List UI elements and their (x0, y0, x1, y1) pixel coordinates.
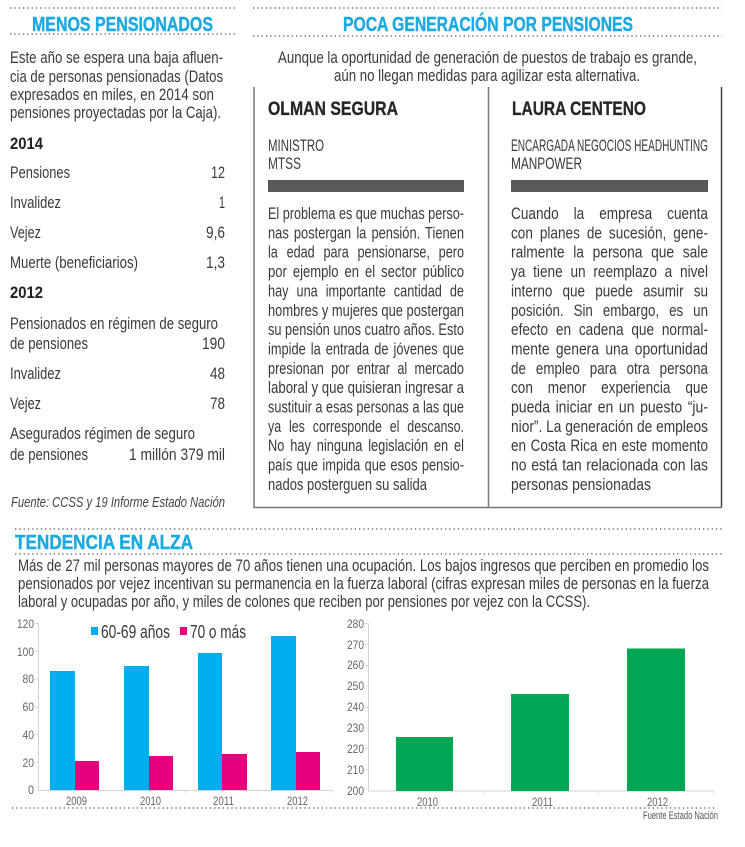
quote text: nas postergan la pensión. Tienen (268, 223, 464, 242)
y axis labels: 200 (347, 784, 364, 798)
data list: 2012: de pensiones (10, 445, 88, 464)
role: MINISTRO (268, 136, 324, 155)
text block: introduction (10, 48, 223, 122)
y axis labels: 210 (347, 763, 364, 777)
quote text: pueda iniciar en un puesto “ju- (511, 398, 708, 416)
x axis labels (417, 795, 668, 809)
bars: 70 o más (75, 752, 320, 790)
y axis labels: 250 (347, 679, 364, 693)
column: Laura Centeno (511, 98, 708, 494)
data list: 2012 (10, 283, 225, 464)
quote text: El problema es que muchas perso- (268, 204, 464, 223)
data list: 2014: Invalidez (10, 193, 61, 212)
quote text: presionan por entrar al mercado (268, 359, 464, 378)
divider bar (511, 180, 708, 192)
text block: trend description: laboral y ocupadas por año, y miles de colones que reciben por pensiones por vejez con la CCSS). (18, 592, 590, 611)
data list: 2014: 12 (211, 163, 225, 182)
x axis labels: 2009 (66, 794, 87, 808)
y axis labels: 80 (22, 672, 34, 686)
quote text: por ejemplo en el sector público (268, 262, 464, 281)
y axis labels: 120 (17, 617, 34, 631)
y axis labels: 240 (347, 700, 364, 714)
y axis labels: 220 (347, 742, 364, 756)
role (511, 136, 708, 173)
text block: introduction: Este año se espera una baja afluen- (10, 48, 223, 67)
text block: introduction: cia de personas pensionadas (Datos (10, 67, 223, 86)
text block: introduction: expresados en miles, en 2014 son (10, 85, 214, 104)
quote text: país que impida que esos pensio- (268, 456, 464, 474)
x axis labels: 2011 (532, 795, 553, 809)
text block: trend description (18, 556, 709, 611)
heading: menos pensionados: MENOS PENSIONADOS (32, 14, 213, 36)
bar chart: workers by age group (17, 617, 332, 808)
y axis labels: 0 (28, 783, 34, 797)
role: MTSS (268, 154, 301, 173)
name: LAURA CENTENO (512, 98, 646, 120)
data list: 2012: 48 (210, 364, 225, 383)
heading: poca generacion por pensiones: POCA GENERACIÓN POR PENSIONES (343, 12, 633, 36)
quote text (268, 204, 464, 494)
y axis labels: 60 (22, 700, 34, 714)
x axis labels: 2012 (287, 794, 308, 808)
column: Olman Segura (268, 98, 464, 494)
x axis labels: 2010 (140, 794, 161, 808)
data list: 2014: 9,6 (206, 223, 225, 242)
quote text: la edad para pensionarse, pero (268, 243, 464, 262)
x axis labels: 2012 (647, 795, 668, 809)
y axis labels: 20 (22, 756, 34, 770)
y axis labels: 280 (347, 617, 364, 631)
data list: 2012: 1 millón 379 mil (129, 445, 225, 464)
quote text: sustituir a esas personas a las que (268, 398, 464, 416)
data list: 2014: 2014 (10, 134, 43, 153)
panel: menos pensionados (10, 14, 225, 511)
frame: two interview columns (254, 87, 722, 508)
quote text: No hay ninguna legislación en el (268, 436, 464, 455)
legend: 70 o más (190, 622, 246, 642)
y axis labels (17, 617, 34, 797)
bars (396, 648, 685, 791)
bars: 60-69 años (50, 636, 296, 790)
data list: 2012: Invalidez (10, 364, 61, 383)
y axis labels: 100 (17, 645, 34, 659)
role (268, 136, 324, 173)
legend (91, 622, 246, 642)
y axis labels: 40 (22, 728, 34, 742)
heading: tendencia en alza: TENDENCIA EN ALZA (15, 532, 193, 554)
source note: Fuente: CCSS y 19 Informe Estado Nación (11, 495, 225, 511)
data list: 2014: Vejez (10, 223, 41, 242)
y axis labels: 270 (347, 638, 364, 652)
data list: 2012: Pensionados en régimen de seguro (10, 314, 218, 333)
quote text (511, 204, 708, 494)
quote text: impide la entrada de jóvenes que (268, 340, 464, 358)
data list: 2012: 78 (210, 394, 225, 413)
quote text: ya les corresponde el descanso. (268, 417, 464, 436)
divider bar (268, 180, 464, 192)
quote text: no está tan relacionada con las (511, 456, 708, 474)
data list: 2014: Pensiones (10, 163, 70, 182)
role: MANPOWER (511, 154, 582, 173)
text block: introduction: pensiones proyectadas por la Caja). (10, 103, 221, 122)
data list: 2012: Asegurados régimen de seguro (10, 424, 195, 443)
legend: 60-69 años (101, 622, 170, 642)
text block: section intro: aún no llegan medidas para agilizar esta alternativa. (334, 66, 640, 85)
y axis labels (347, 617, 364, 798)
bar chart: pension amounts (347, 617, 714, 809)
text block: section intro (278, 48, 697, 85)
data list: 2014: Muerte (beneficiarios) (10, 253, 138, 272)
quote text: personas pensionadas (511, 475, 651, 494)
data list: 2014: 1 (219, 193, 225, 212)
x axis labels (66, 794, 308, 808)
quote text: hombres y mujeres que postergan (268, 301, 464, 320)
quote text: hay una importante cantidad de (268, 281, 464, 300)
y axis labels: 260 (347, 658, 364, 672)
data list: 2012: Vejez (10, 394, 41, 413)
panel: tendencia en alza (15, 532, 718, 822)
x axis labels: 2010 (417, 795, 438, 809)
quote text: laboral y que quisieran ingresar a (268, 378, 464, 397)
quote text: nados posterguen su salida (268, 475, 427, 494)
quote text: su pensión unos cuatro años. Esto (268, 320, 464, 339)
data list: 2014: 1,3 (206, 253, 225, 272)
x axis labels: 2011 (213, 794, 234, 808)
data list: 2012: de pensiones (10, 334, 88, 353)
y axis labels: 230 (347, 721, 364, 735)
panel: poca generacion por pensiones (254, 12, 722, 508)
data list: 2012: 2012 (10, 283, 43, 302)
name: OLMAN SEGURA (268, 98, 398, 120)
data list: 2012: 190 (202, 334, 225, 353)
data list: 2014 (10, 134, 225, 272)
